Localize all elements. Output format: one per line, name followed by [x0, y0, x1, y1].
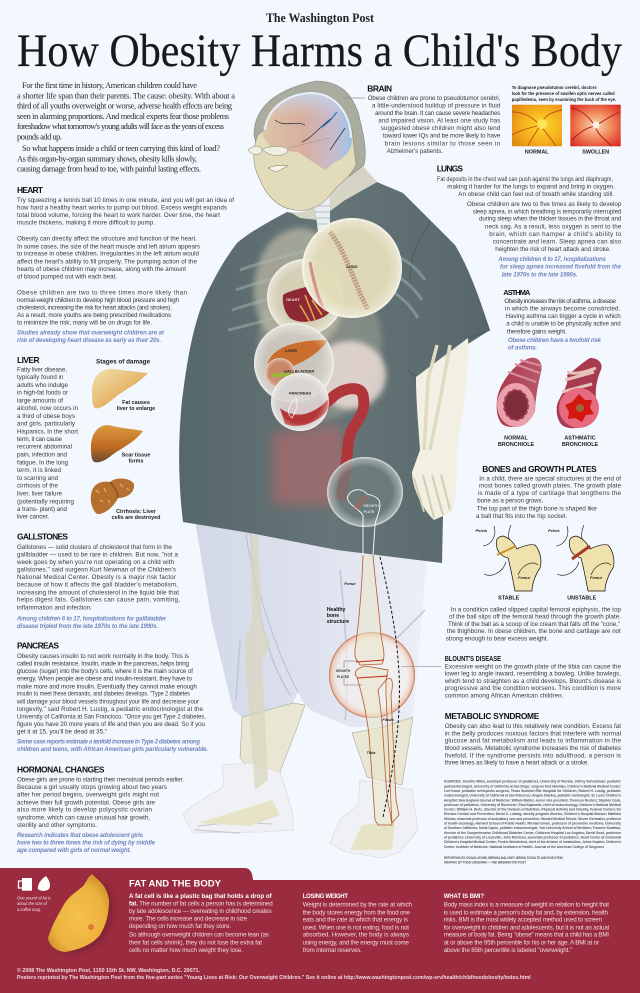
text: gallstones body: National Medical Center. Obesity is a major risk factor: [17, 574, 176, 581]
diagram: unstable femur: UNSTABLE: [567, 595, 597, 601]
text: heart body: total blood volume, forcing the heart to work harder. Over time, the heart: [17, 212, 220, 219]
footer credit: © 2008 The Washington Post, 1150 15th St. NW, Washington, D.C. 20071.: [17, 967, 201, 974]
text: liver body: adults who indulge: [17, 382, 69, 389]
illustration: fat liver: Fat causes: [122, 400, 150, 406]
illustration: cirrhosis liver: Cirrhosis: Liver: [116, 509, 157, 515]
text: what is bmi: is used to estimate a person's body fat and, by extension, health: [444, 909, 609, 916]
text: heart body: to minimize the risk; many will be on drugs for life.: [17, 320, 152, 327]
text: optic nerve note: To diagnose pseudotumor cerebri, doctors: [512, 85, 597, 91]
heading: stages of damage: Stages of damage: [96, 358, 150, 365]
illustration: normal bronchiole: NORMAL: [504, 436, 529, 442]
sources: [444, 780, 622, 864]
text: heart body: how hard a healthy heart works to pump out blood. Excess weight expands: [17, 205, 227, 212]
panel: gallstones: [16, 532, 180, 630]
shirt: [179, 182, 490, 563]
left shoe: [183, 763, 293, 833]
label: healthy bone structure: bone: [327, 613, 339, 619]
callout: gallstones: disease tripled from the late 1970s to the late 1990s.: [17, 624, 158, 630]
text: liver body: pain, infection and: [17, 452, 68, 459]
text: hormonal body: [17, 777, 184, 829]
heading: metabolic: METABOLIC SYNDROME: [445, 711, 540, 721]
text: brain body: [368, 95, 501, 155]
callout: heart: [17, 331, 165, 344]
text: liver body: liver, liver failure: [17, 490, 63, 497]
heading: hormonal changes: HORMONAL CHANGES: [17, 764, 105, 774]
intro text: As this organ-by-organ summary shows, obesity kills slowly,: [17, 154, 197, 164]
arm and hand: [412, 338, 468, 520]
text: heart body: hearts of obese children may increase, along with the amount: [17, 266, 186, 273]
text: liver body: [17, 366, 79, 521]
text: pancreas body: will damage your blood vessels throughout your life and decrease your: [16, 698, 199, 705]
callout: asthma: [508, 338, 602, 352]
sources: of health sociology, Harvard School of Public Health; Michael Goran, professor of preventive medicine, University: [444, 822, 622, 826]
text: fat and the body: by late adolescence — overeating in childhood creates: [129, 908, 272, 915]
text: heart body: [17, 197, 234, 327]
text: fat and the body: more. The cells increase and decrease in size: [129, 915, 248, 922]
text: fat and the body: [129, 893, 273, 954]
text: blount's body: Excessive weight on the growth plate of the tibia can cause the: [445, 663, 622, 670]
callout: lungs: Among children 6 to 17, hospitalizations: [497, 257, 607, 263]
text: pancreas body: University of California at San Francisco. "Once you get Type 2 diabetes,: [17, 713, 206, 720]
text: bones intro: The top part of the thigh bone is shaped like: [477, 506, 597, 513]
text: liver body: fatigue. In the long: [17, 459, 69, 466]
callout: lungs: [497, 257, 622, 278]
text: pancreas body: Obesity causes insulin to not work normally in the body. This is: [17, 653, 189, 660]
text: bones intro: a ball that fits into the hip socket.: [476, 513, 568, 520]
leader lines: [343, 98, 441, 667]
text: optic nerve note: [512, 85, 616, 103]
caption: pound of fat: a coffee mug.: [17, 907, 41, 912]
text: hormonal body: syndrome, which can cause unusual hair growth,: [17, 814, 150, 821]
text: pancreas body: [16, 653, 206, 736]
callout: gallstones: [16, 617, 167, 630]
text: gallstones body: inflammation and infection.: [17, 604, 92, 611]
text: brain body: Obese children are prone to pseudotumor cerebri,: [368, 95, 501, 102]
text: what is bmi: above the 85th percentile is labeled "overweight.": [444, 947, 572, 954]
text: liver body: liver cancer.: [17, 514, 49, 521]
text: liver body: term, it is linked: [17, 467, 62, 474]
text: brain body: around the brain. It can cause severe headaches: [375, 110, 500, 117]
intestine: [280, 389, 364, 500]
text: asthma body: in which the airways become constricted.: [505, 305, 621, 312]
callout: gallstones: Among children 6 to 17, hospitalizations for gallbladder: [16, 617, 167, 623]
bubble: gallbladder: [265, 358, 314, 388]
image: fat tissue: [48, 874, 113, 954]
callout: heart: risk of developing heart disease as early as their 20s.: [17, 338, 161, 344]
intro text: foreshadow what tomorrow's young adults will face as the years of excess: [17, 122, 224, 131]
caption: pound of fat: One pound of fat is: [17, 896, 52, 900]
text: fat and the body: their fat cells shrink), they do not lose the extra fat: [129, 939, 262, 946]
text: asthma body: [504, 298, 621, 335]
illustration: normal bronchiole: BRONCHIOLE: [498, 442, 535, 448]
label: healthy bone structure: [327, 607, 349, 625]
text: blount's body: lower leg to angle inward, resembling a bowleg. Unlike bowlegs,: [445, 671, 621, 678]
intro text: For the first time in history, American children could have: [22, 81, 197, 90]
leg bones with knee magnifier: Fibula: [382, 718, 394, 722]
text: pancreas body: insulin to meet these demands, and diabetes develops. "Type 2 diabetes: [17, 691, 190, 698]
callout: pancreas: [17, 740, 208, 753]
footer panel: fat and the body: [0, 868, 640, 993]
text: lungs body: An obese child can feel out of breath while standing still.: [458, 191, 614, 198]
text: what is bmi: risks. BMI is the most widely accepted method used to screen: [444, 917, 603, 924]
leg bones with knee magnifier: Tibia: [367, 751, 375, 755]
callout: hormonal: age compared with girls of normal weight.: [17, 848, 131, 854]
ghost torso organs: [228, 228, 425, 505]
text: brain body: brain lesions similar to those seen in: [385, 140, 501, 147]
text: losing weight: eats and the rate at which that energy is: [303, 917, 408, 924]
bubble: pancreas: PANCREAS: [289, 390, 311, 396]
callout: hormonal: [17, 833, 156, 854]
illustration: asthmatic bronchiole: ASTHMATIC: [564, 436, 596, 442]
text: liver body: recurrent abdominal: [17, 444, 72, 451]
neck and trachea: [290, 165, 377, 220]
text: asthma body: Obesity increases the risk of asthma, a disease: [504, 298, 617, 305]
illustration: fat liver: liver to enlarge: [117, 406, 155, 412]
text: blount's body: progressive and the condition worsens. This condition is more: [445, 685, 622, 692]
intro text: causing damage from head to toe, with painful lasting effects.: [17, 164, 201, 174]
text: gallstones body: gallbladder — used to be rare in children. But now, "not a: [17, 551, 179, 558]
text: optic nerve note: look for the presence of swollen optic nerves called: [512, 91, 615, 97]
text: lungs body: Obese children are two to five times as likely to develop: [467, 201, 622, 208]
illustration: scar tissue liver: Scar tissue: [122, 453, 150, 459]
text: pancreas body: get it at 15, you'll be dead at 35.": [17, 729, 107, 736]
bubble: gallbladder: GALLBLADDER: [284, 368, 314, 374]
sources: Center; William H. Dietz, director of the Division of Nutrition, Physical Activity and Obesity, Federal Centers for: [444, 808, 622, 812]
panel: heart: [17, 185, 234, 344]
heading: liver: LIVER: [17, 355, 40, 365]
text: brain body: suggested obese children might also tend: [381, 125, 501, 132]
text: gallstones body: Gallstones — solid clusters of cholesterol that form in the: [17, 544, 173, 551]
sources: director of the Comprehensive Childhood Diabetes Center, Childrens Hospital Los Angeles; David Good, professor: [444, 831, 621, 835]
text: epiphysis: the thighbone. In obese children, the bone and cartilage are not: [447, 628, 621, 635]
footer credit: [17, 967, 531, 981]
image: swollen optic nerve: [570, 105, 621, 156]
text: pancreas body: glucose (sugar) into the body's cells, where it is the main source of: [17, 668, 193, 675]
text: lungs body: neck sag. As a result, less oxygen is sent to the: [485, 223, 622, 230]
intro text: So what happens inside a child or teen carrying this kind of load?: [22, 144, 220, 153]
diagram: unstable femur: Femur: [590, 575, 603, 580]
foot bones: [198, 800, 280, 826]
text: pancreas body: figure you have 20 more years of life and then you are dead. So if you: [17, 721, 206, 728]
text: epiphysis: strong enough to bear excess weight.: [446, 635, 549, 642]
text: blount's body: common among African American children.: [445, 692, 564, 699]
shorts: [195, 520, 427, 727]
text: liver body: a trans- plant) and: [17, 506, 68, 513]
sources: Disease Control and Prevention; David S. Ludwig, obesity program director, Children's Hospital Boston; Matthew: [444, 812, 621, 816]
callout: lungs: for sleep apnea increased fivefold from the: [500, 265, 622, 271]
text: fat and the body: fat. The number of fat cells a person has is determined: [129, 901, 273, 908]
leg bones with knee magnifier: Femur: [344, 582, 356, 586]
text: liver body: term, it can cause: [17, 436, 63, 443]
text: liver body: Hispanics. In the short: [17, 428, 78, 435]
callout: pancreas: children and teens, with African American girls particularly vulnerable.: [17, 747, 208, 753]
text: liver body: cirrhosis of the: [17, 483, 59, 490]
text: brain body: and impaired vision. At least one study has: [378, 118, 500, 125]
hair: [254, 81, 365, 176]
brain: [263, 93, 352, 170]
text: heart body: As a result, more youths are being prescribed medications: [17, 312, 171, 319]
bubble: lung: [302, 218, 402, 318]
image: normal optic nerve: [512, 105, 562, 156]
text: what is bmi: at or above the 95th percentile for his or her age. A BMI at or: [444, 939, 599, 946]
diagram: stable femur: Femur: [518, 575, 531, 580]
illustration: scar tissue liver: forms: [129, 459, 143, 465]
panel: lungs: [437, 164, 622, 278]
sources: SOURCES: Jennifer Miller, assistant professor of pediatrics, University of Florida; Jeffrey Schuchman, pediatric: [444, 780, 621, 784]
text: asthma body: Having asthma can trigger a cycle in which: [506, 313, 621, 320]
text: optic nerve note: papilledema, seen by examining the back of the eye.: [512, 97, 616, 103]
bubble: heart: HEART: [286, 297, 300, 302]
text: hormonal body: after her period begins, overweight girls might not: [17, 792, 159, 799]
text: what is bmi: for overweight in children and adolescents, but it is not an actual: [444, 924, 609, 931]
label: healthy bone structure: structure: [327, 619, 349, 625]
text: bones intro: [476, 476, 622, 520]
text: liver body: to scarring and: [17, 475, 59, 482]
heading: bones: BONES and GROWTH PLATES: [482, 464, 597, 474]
text: epiphysis: Think of the ball as a scoop of ice cream that falls off the "cone,": [448, 621, 620, 628]
heading: heart: HEART: [17, 185, 44, 195]
text: lungs body: [437, 176, 622, 253]
heading: pancreas: PANCREAS: [17, 641, 59, 651]
callout: asthma: of asthma.: [508, 346, 537, 352]
text: hormonal body: sterility and other symptoms.: [17, 822, 97, 829]
text: epiphysis: [446, 606, 622, 642]
text: bones intro: In a child, there are special structures at the end of: [479, 476, 621, 483]
text: heart body: of blood pumped out with each beat.: [17, 274, 117, 281]
illustration: asthmatic bronchiole: [557, 358, 602, 448]
diagram: stable femur: STABLE: [498, 595, 520, 601]
text: gallstones body: helps digest fats. Gallstones can cause pain, vomiting,: [17, 597, 180, 604]
text: asthma body: a child is unable to be physically active and: [506, 321, 621, 328]
text: bones intro: bone as a person grows.: [477, 497, 544, 504]
intro text: a shorter life span than their parents. The cause: obesity. With about a: [17, 91, 235, 100]
text: heart body: Try squeezing a tennis ball 10 times in one minute, and you will get an idea of: [17, 197, 234, 204]
caption: pound of fat: [17, 896, 52, 912]
text: heart body: to increase in obese children. Irregularities in the left atrium would: [17, 251, 200, 258]
text: metabolic body: glucose and fat metabolism and leads to inflammation in the: [445, 738, 622, 745]
text: pancreas body: energy. When people are obese and insulin-resistant, they have to: [17, 676, 193, 683]
right lower leg: [352, 717, 413, 785]
text: liver body: (potentially requiring: [17, 498, 75, 505]
text: liver body: typically found in: [17, 374, 64, 381]
glasses and mouth: [248, 138, 330, 156]
text: epiphysis: of the ball slips off the femoral head through the growth plate.: [449, 613, 621, 620]
footer background: [0, 868, 640, 993]
text: bones intro: most bones called growth plates. The growth plate: [479, 483, 622, 490]
heading: blount's: BLOUNT'S DISEASE: [445, 654, 501, 663]
text: metabolic body: three times as likely to have a heart attack or a stroke.: [445, 759, 589, 766]
caption: pound of fat: about the size of: [17, 901, 48, 906]
heading: brain: BRAIN: [367, 83, 392, 93]
panel: asthma: [497, 288, 621, 448]
diagram: unstable femur: [548, 525, 614, 601]
bubble: liver: [254, 323, 334, 403]
text: liver body: in high-fat foods or: [17, 390, 68, 397]
bubble: growth plate: [327, 457, 403, 555]
heading: asthma: ASTHMA: [503, 288, 531, 297]
bubble: pancreas: [271, 373, 329, 431]
text: liver body: a third of obese boys: [17, 413, 75, 420]
leg bones with knee magnifier: [329, 555, 415, 825]
illustration: cirrhosis liver: [91, 478, 160, 521]
icon: pound of fat: [38, 876, 50, 891]
sources: Lori Karol, pediatric orthopedic surgeon, Texas Scottish Rite Hospital for Children; Robert H. Lustig, pediatric: [444, 789, 621, 793]
panel: bones and growth plates: [446, 464, 622, 642]
text: liver body: alcohol, now occurs in: [17, 405, 79, 412]
text: gallstones body: because of how it affects the gall bladder's metabolism,: [17, 582, 178, 589]
heading: gallstones: GALLSTONES: [17, 532, 68, 542]
panel: liver: [17, 355, 160, 521]
callout: pancreas: Some case reports estimate a tenfold increase in Type 2 diabetes among: [17, 740, 200, 746]
text: losing weight: LOSING WEIGHT: [303, 894, 348, 900]
text: losing weight: used. When one is not eating, food is not: [303, 924, 409, 931]
illustration: cirrhosis liver: cells are destroyed: [112, 515, 160, 521]
sources: REPORTING BY SUSAN LEVINE, BRENNA MALONEY, BRIGID SCHULTE AND ROB STEIN: [444, 856, 563, 860]
text: what is bmi: measure of body fat. Being "obese" means that a child has a BMI: [444, 932, 609, 939]
bubble: growth plate: GROWTH: [363, 504, 379, 508]
leg bones with knee magnifier: GROWTH: [336, 669, 351, 673]
text: liver body: large amounts of: [17, 397, 63, 404]
text: lungs body: sleep apnea, in which breathing is temporarily interrupted: [473, 208, 622, 215]
icon: coffee mug: [18, 878, 32, 891]
illustration: obese child figure: [179, 81, 490, 858]
diagram: stable femur: Pelvis: [476, 528, 488, 533]
text: gallstones body: week goes by when you're not operating on a child with: [16, 559, 175, 566]
text: what is bmi: [444, 894, 609, 954]
text: heart body: normal-weight children to develop high blood pressure and high: [17, 297, 180, 304]
illustration: normal bronchiole: [497, 358, 542, 448]
text: epiphysis: In a condition called slipped capital femoral epiphysis, the top: [451, 606, 622, 613]
text: gallstones body: [16, 544, 180, 611]
text: lungs body: Fat deposits in the chest wall can push against the lungs and diaphragm,: [437, 176, 613, 183]
text: blount's body: [444, 663, 622, 699]
text: liver body: Fatty liver disease,: [17, 366, 67, 373]
text: lungs body: concentrate and learn. Sleep apnea can also: [493, 238, 622, 245]
panel: hormonal changes: [17, 764, 184, 854]
text: fat and the body: cells no matter how much weight they lose.: [129, 947, 243, 954]
ghost bones left leg: [245, 535, 270, 790]
text: hormonal body: also more likely to develop polycystic ovarian: [17, 807, 153, 814]
bubble: heart: [267, 259, 343, 335]
text: heart body: muscle thickens, making it more difficult to pump.: [17, 220, 155, 227]
text: pancreas body: make more and more insulin. Eventually they cannot make enough: [17, 683, 198, 690]
panel: metabolic syndrome: [445, 711, 622, 766]
intro text: pounds add up.: [17, 132, 62, 142]
text: hormonal body: achieve their full growth potential. Obese girls are: [17, 799, 156, 806]
text: metabolic body: [445, 723, 622, 766]
text: losing weight: using energy, and the energy must come: [303, 939, 410, 946]
panel: brain: [367, 83, 621, 156]
sources: GRAPHIC BY TODD LINDEMAN — THE WASHINGTON POST: [444, 860, 527, 864]
bubble: lung: LUNG: [346, 264, 358, 269]
illustration: scar tissue liver: [91, 425, 150, 465]
text: losing weight: [303, 894, 413, 954]
text: metabolic body: fivefold. If the syndrome persists into adulthood, a person is: [445, 752, 621, 759]
callout: lungs: late 1970s to the late 1990s.: [502, 272, 578, 278]
text: asthma body: therefore gains weight.: [507, 328, 567, 335]
callout: asthma: Obese children have a twofold risk: [508, 338, 602, 344]
diagram: stable femur: [476, 525, 541, 601]
panel: pancreas: [16, 641, 208, 753]
image: normal optic nerve: NORMAL: [525, 150, 549, 156]
leg bones with knee magnifier: PLATES: [337, 675, 349, 679]
image: swollen optic nerve: SWOLLEN: [582, 150, 609, 156]
bubble: growth plate: PLATE: [364, 510, 375, 514]
text: bones intro: is made of a type of cartilage that lengthens the: [478, 490, 622, 497]
diagram: unstable femur: Pelvis: [548, 528, 560, 533]
text: brain body: a little-understood buildup of pressure in fluid: [372, 103, 501, 110]
illustration: fat liver: [92, 369, 155, 412]
heading: fat and the body: FAT AND THE BODY: [129, 879, 222, 890]
text: liver body: and girls, particularly: [17, 421, 76, 428]
text: heart body: In some cases, the size of the heart muscle and left atrium appears: [17, 243, 200, 250]
callout: heart: Studies already show that overweight children are at: [17, 331, 165, 337]
text: losing weight: absorbed. However, the body is always: [303, 932, 409, 939]
text: fat and the body: A fat cell is like a plastic bag that holds a drop of: [129, 893, 273, 900]
text: what is bmi: WHAT IS BMI?: [444, 894, 484, 900]
intro text: [17, 81, 235, 174]
left lower leg: [240, 703, 305, 772]
text: blount's body: which tend to straighten as a child develops, Blount's disease is: [444, 678, 621, 685]
text: heart body: affect the heart's ability to fill properly. The pumping action of the: [17, 258, 198, 265]
text: lungs body: making it harder for the lungs to expand and bring in oxygen.: [447, 183, 615, 190]
intro text: seen in alarming proportions. And medical experts fear those problems: [17, 112, 229, 121]
right shoe: [330, 780, 418, 858]
text: losing weight: the body stores energy from the food one: [303, 909, 411, 916]
label: healthy bone structure: Healthy: [327, 607, 346, 613]
heading: lungs: LUNGS: [437, 164, 463, 174]
text: brain body: toward lower IQs and be more likely to have: [383, 133, 501, 140]
text: hormonal body: Obese girls are prone to starting their menstrual periods earlier.: [17, 777, 184, 784]
bubble: liver: LIVER: [285, 348, 297, 353]
illustration: asthmatic bronchiole: BRONCHIOLE: [562, 442, 599, 448]
text: metabolic body: blood vessels. Metabolic syndrome increases the risk of diabetes: [445, 745, 621, 752]
text: gallstones body: gallstones," said surgeon Kurt Newman of the Children's: [17, 567, 176, 574]
callout: hormonal: have two to three times the risk of dying by middle: [17, 840, 156, 846]
text: fat and the body: So although overweight children can become lean (as: [129, 932, 269, 939]
text: metabolic body: Obesity can also lead to this relatively new condition. Excess fat: [445, 723, 621, 730]
text: fat and the body: depending on how much fat they store.: [129, 923, 231, 930]
text: losing weight: Weight is determined by the rate at which: [303, 901, 413, 908]
face: [254, 100, 356, 210]
text: pancreas body: called insulin resistance. Insulin, made in the pancreas, helps bring: [17, 661, 190, 668]
text: losing weight: from internal reserves.: [303, 947, 362, 954]
text: brain body: Alzheimer's patients.: [387, 148, 443, 155]
panel: blount's disease: [444, 654, 622, 699]
intro text: third of all youths overweight or worse, adverse health effects are being: [17, 102, 233, 111]
text: heart body: cholesterol, increasing the risk for heart attacks (and strokes).: [17, 304, 172, 311]
text: metabolic body: in the belly produces noxious factors that interfere with normal: [445, 730, 621, 737]
text: lungs body: brain, which can hamper a child's ability to: [489, 231, 622, 238]
footer credit: Posters reprinted by The Washington Post from the five-part series "Young Lives at Risk: Our Overweight Children." See it online at http://www.washingtonpost.com/wp-srv/health/childhoodobesity/index.html: [17, 975, 531, 981]
sources: of pediatrics, University of Louisville; John Morrison, associate professor of pediatrics, Heart Center at Cincinnati: [444, 836, 621, 840]
text: lungs body: during sleep when the thicker tissues in the throat and: [479, 216, 622, 223]
text: heart body: Obesity can directly affect the structure and function of the heart.: [17, 236, 197, 243]
text: gallstones body: increasing the amount of cholesterol in the liquid bile that: [17, 589, 179, 596]
text: heart body: Obese children are two to three times more likely than: [17, 289, 188, 296]
sources: Center; Institute of Medicine, National Institutes of Health; Journal of the American College of Surgeons: [444, 845, 604, 849]
callout: hormonal: Research indicates that obese adolescent girls: [17, 833, 144, 839]
text: what is bmi: Body mass index is a measure of weight in relation to height that: [444, 901, 609, 908]
text: pancreas body: longevity," said Robert H. Lustig, a pediatric endocrinologist at the: [17, 706, 204, 713]
text: hormonal body: Because a girl usually stops growing about two years: [17, 784, 167, 791]
masthead: The Washington Post: [266, 10, 375, 25]
text: lungs body: heighten the risk of heart attack and stroke.: [495, 246, 611, 253]
